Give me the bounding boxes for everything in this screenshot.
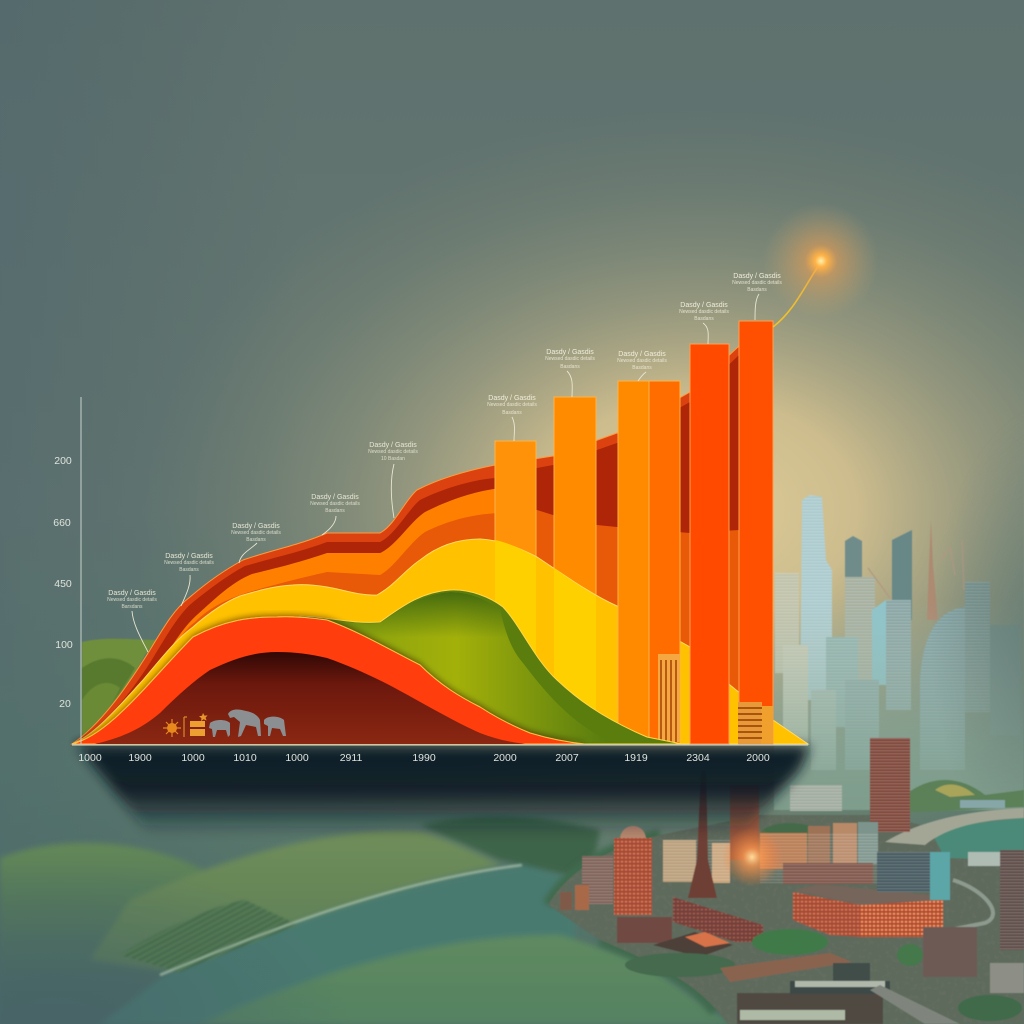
callout 3 <box>231 523 281 543</box>
callout 9: Dasdy / Gasdis <box>680 302 728 309</box>
icon: small animal <box>209 720 230 737</box>
right dark tower <box>1000 850 1024 950</box>
y axis labels: 660 <box>53 517 71 529</box>
callout 9: Basdans <box>694 316 714 322</box>
left-bottom fog <box>0 830 370 1024</box>
y axis labels: 100 <box>55 639 73 651</box>
x axis labels: 1000 <box>285 752 309 764</box>
callout 6: Newsed dasdic details <box>487 402 537 408</box>
annotation glow line <box>773 262 821 327</box>
callout 4: Newsed dasdic details <box>310 501 360 507</box>
x axis labels: 2911 <box>340 752 362 764</box>
landscape: hills and river <box>0 817 730 1024</box>
upper river and bridge <box>885 780 1024 866</box>
callout 5 <box>368 442 418 462</box>
blue glass building <box>877 852 950 900</box>
callout 7: Newsed dasdic details <box>545 356 595 362</box>
callout 4 <box>310 494 360 514</box>
x axis labels: 1000 <box>78 752 102 764</box>
layer: orange band <box>76 488 500 744</box>
icon: striped building <box>658 654 680 742</box>
callout 1: Newsed dasdic details <box>107 597 157 603</box>
trees behind city <box>760 823 820 847</box>
x axis labels: 1919 <box>624 752 648 764</box>
glowing end point <box>763 203 879 319</box>
callout 5: Newsed dasdic details <box>368 449 418 455</box>
x axis labels: 1990 <box>412 752 436 764</box>
bar 1 <box>495 441 536 744</box>
building: dark red tower <box>870 738 910 832</box>
callout connectors <box>132 294 759 652</box>
callout 6: Basdans <box>502 410 522 416</box>
right low blocks <box>990 963 1024 993</box>
ghost tower <box>730 785 759 860</box>
callout 2 <box>164 553 214 573</box>
green hill behind chart <box>82 639 158 738</box>
callout 8: Newsed dasdic details <box>617 358 667 364</box>
land base <box>548 815 1024 1024</box>
x axis labels: 1000 <box>181 752 205 764</box>
callout 1: Barsdans <box>121 604 143 610</box>
x axis labels: 2000 <box>493 752 517 764</box>
tree fringe around city shore <box>548 835 715 1012</box>
y axis labels: 20 <box>59 698 71 710</box>
lower complex <box>720 953 960 1024</box>
callout 6: Dasdy / Gasdis <box>488 395 536 402</box>
small left blocks <box>560 856 613 910</box>
x axis labels <box>78 752 770 764</box>
bar 5 <box>738 321 773 744</box>
callout 7: Dasdy / Gasdis <box>546 349 594 356</box>
x axis labels: 2304 <box>686 752 710 764</box>
callout 7 <box>545 349 595 370</box>
callout 1: Dasdy / Gasdis <box>108 590 156 597</box>
layer: top red band <box>72 346 739 744</box>
layer: dark red band <box>74 355 739 744</box>
bar 4 <box>690 344 729 744</box>
callout 10 <box>732 273 782 293</box>
x axis labels: 2007 <box>555 752 579 764</box>
curving road <box>950 880 993 930</box>
field rows <box>120 900 298 972</box>
city skyline <box>774 410 1024 871</box>
callout 8 <box>617 351 667 371</box>
bar 3 <box>618 381 680 744</box>
callout 5: Dasdy / Gasdis <box>369 442 417 449</box>
bar tints over yellow <box>495 540 596 744</box>
bar 2 <box>554 397 596 744</box>
callout 3: Basdans <box>246 537 266 543</box>
brown low-rise <box>923 927 977 977</box>
chart cast shadow <box>78 746 810 835</box>
low dark-red block <box>617 917 672 943</box>
red dome tower <box>614 826 652 915</box>
callout 4: Dasdy / Gasdis <box>311 494 359 501</box>
callout 5: 10 Basdan <box>381 456 405 462</box>
y axis labels <box>53 455 73 710</box>
icon: large animal <box>228 709 261 737</box>
callout 2: Basdans <box>179 567 199 573</box>
callout 10: Dasdy / Gasdis <box>733 273 781 280</box>
city light flare <box>722 827 782 887</box>
long brick block <box>673 897 763 942</box>
y axis labels: 450 <box>54 578 72 590</box>
layer: maroon core <box>95 652 525 744</box>
callout 10: Newsed dasdic details <box>732 280 782 286</box>
icon: person and crate <box>184 713 208 737</box>
tree clumps <box>625 929 1022 1021</box>
x axis <box>72 745 808 764</box>
road on the hills <box>160 865 522 975</box>
green top shading <box>300 592 613 744</box>
icon: stacked building <box>738 702 773 744</box>
y axis <box>53 397 81 744</box>
x axis labels: 1900 <box>128 752 152 764</box>
bottom city <box>548 738 1024 1024</box>
callout 9 <box>679 302 729 322</box>
bright brick block <box>793 884 943 937</box>
callout 10: Basdans <box>747 287 767 293</box>
callout 1 <box>107 590 157 610</box>
plaza roof <box>653 932 733 957</box>
layer: yellow band <box>72 539 808 744</box>
x axis labels: 2000 <box>746 752 770 764</box>
callout 4: Basdans <box>325 508 345 514</box>
icon: third animal <box>264 717 286 736</box>
callout 3: Newsed dasdic details <box>231 530 281 536</box>
callout 8: Dasdy / Gasdis <box>618 351 666 358</box>
callout 9: Newsed dasdic details <box>679 309 729 315</box>
icon: sun <box>163 719 181 737</box>
x axis labels: 1010 <box>233 752 257 764</box>
layer: dark orange band <box>76 510 739 744</box>
layer: light green <box>300 592 613 744</box>
callout 3: Dasdy / Gasdis <box>232 523 280 530</box>
callout 8: Basdans <box>632 365 652 371</box>
layer: dark green underside <box>300 590 682 744</box>
callout 7: Basdans <box>560 364 580 370</box>
building: cream block <box>663 840 730 883</box>
callout 2: Newsed dasdic details <box>164 560 214 566</box>
callout 2: Dasdy / Gasdis <box>165 553 213 560</box>
layer: red band <box>72 617 585 744</box>
y axis labels: 200 <box>54 455 72 467</box>
building: mid cluster <box>760 822 878 884</box>
stacked area chart and bars <box>72 321 808 744</box>
spire tower <box>688 770 717 898</box>
callout 6 <box>487 395 537 416</box>
